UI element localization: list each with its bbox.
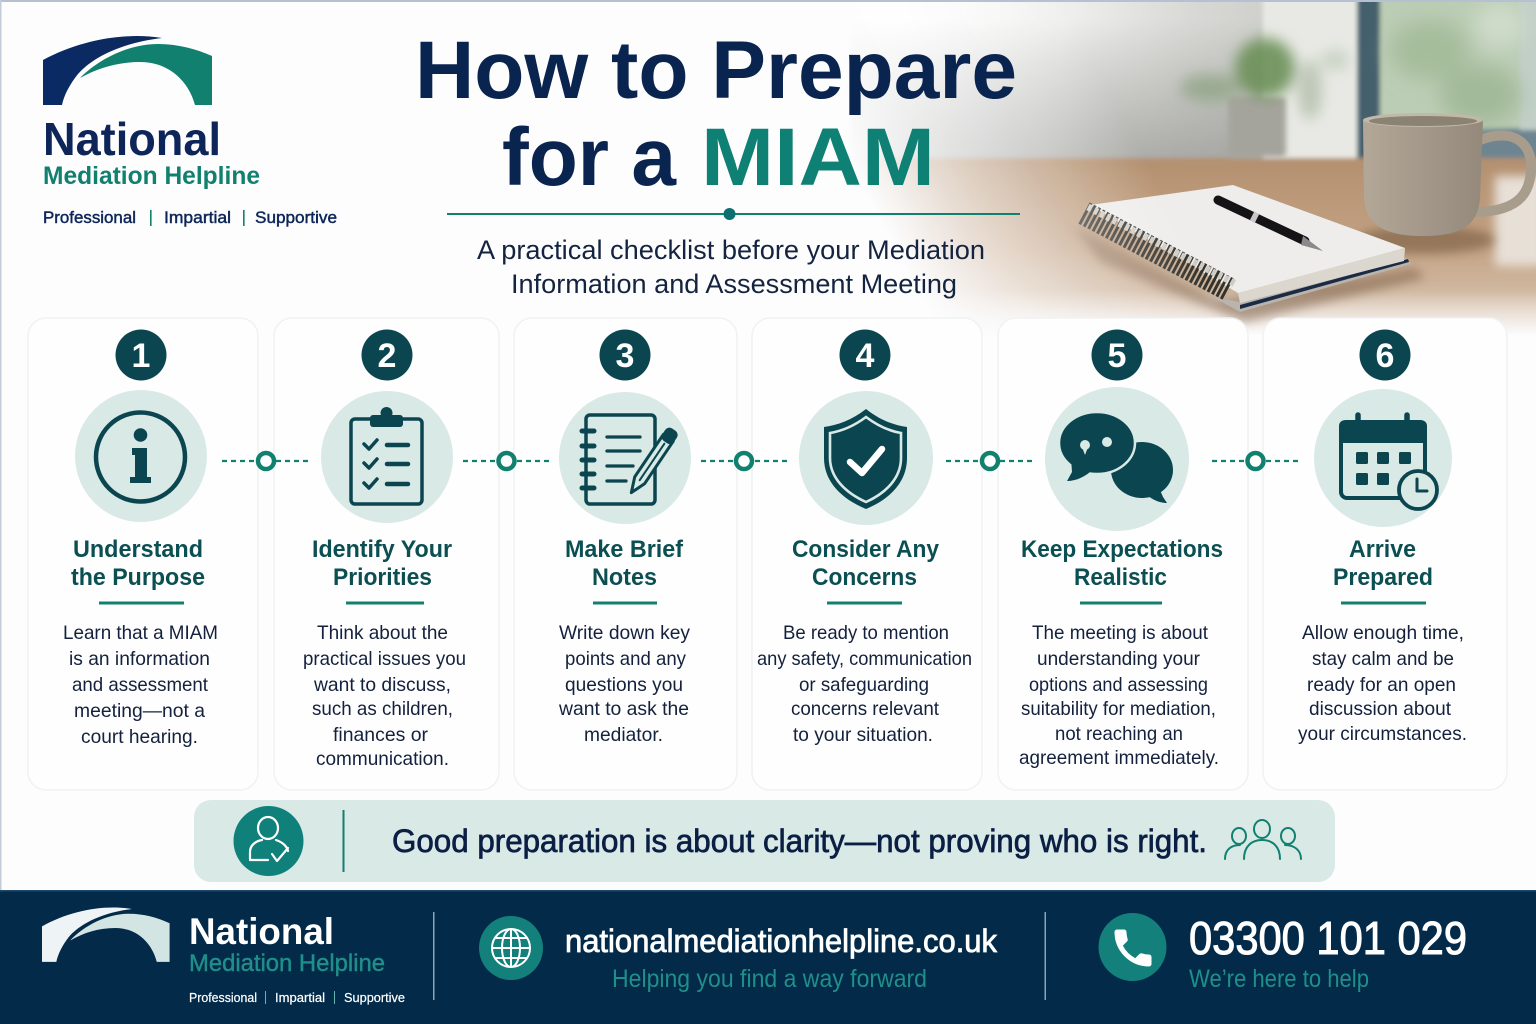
panel: step 3 make brief notes: Write down key <box>559 622 690 644</box>
connector: step 5 to 6 <box>1212 453 1300 469</box>
website: nationalmediationhelpline.co.uk <box>565 923 998 959</box>
panel: step 5 keep expectations realistic <box>998 318 1248 790</box>
icon: person with check <box>250 817 288 861</box>
panel: step 4 consider any concerns: concerns relevant <box>791 698 940 720</box>
phone <box>1098 912 1467 993</box>
panel: step 3 make brief notes: mediator. <box>584 724 663 746</box>
panel: step 3 make brief notes: 3 <box>616 337 634 375</box>
logo: National Mediation Helpline <box>43 36 337 227</box>
pen <box>1218 200 1323 251</box>
panel: step 6 arrive prepared: Arrive <box>1349 536 1416 563</box>
panel: step 3 make brief notes: Make Brief <box>565 536 684 563</box>
panel: step 2 identify your priorities: 2 <box>378 337 396 375</box>
footer logo: Professional <box>189 991 257 1005</box>
icon: shield with check <box>824 409 907 509</box>
panel: step 1 understand the purpose: the Purpose <box>71 564 205 591</box>
logo arch <box>43 36 212 105</box>
logo: National Mediation Helpline: National <box>43 113 221 165</box>
panel: step 6 arrive prepared: stay calm and be <box>1312 648 1454 670</box>
panel: step 5 keep expectations realistic: The meeting is about <box>1032 622 1209 644</box>
icon: notepad and pencil <box>582 415 680 504</box>
panel: step 2 identify your priorities: Priorities <box>333 564 432 591</box>
panel: step 5 keep expectations realistic: Keep Expectations <box>1021 536 1223 563</box>
footer logo: National <box>189 911 334 952</box>
panel: step 5 keep expectations realistic: not reaching an <box>1055 723 1183 745</box>
subtitle <box>477 235 985 299</box>
photo: notebook, pen and mug on a desk <box>850 0 1536 352</box>
panel: step 1 understand the purpose: court hearing. <box>81 726 198 748</box>
icon: information <box>96 412 185 502</box>
panel: step 3 make brief notes: want to ask the <box>558 698 689 720</box>
callout banner <box>194 800 1335 882</box>
website: Helping you find a way forward <box>612 965 927 993</box>
panel: step 6 arrive prepared: Allow enough time, <box>1302 622 1464 644</box>
panel: step 4 consider any concerns: Consider Any <box>792 536 940 563</box>
title <box>415 25 1017 203</box>
panel: step 6 arrive prepared <box>1263 318 1507 790</box>
panel: step 1 understand the purpose: and assessment <box>72 674 209 696</box>
panel: step 5 keep expectations realistic: Realistic <box>1074 564 1167 591</box>
title: for a <box>502 112 677 203</box>
panel: step 4 consider any concerns: or safeguarding <box>799 674 929 696</box>
phone: 03300 101 029 <box>1189 912 1467 964</box>
panel: step 3 make brief notes: Notes <box>592 564 657 591</box>
footer logo: Mediation Helpline <box>189 950 385 977</box>
panel: step 2 identify your priorities: want to discuss, <box>313 674 451 696</box>
panel: step 6 arrive prepared: ready for an open <box>1307 674 1456 696</box>
panel: step 6 arrive prepared: discussion about <box>1309 698 1452 720</box>
panel: step 2 identify your priorities: Think about the <box>317 622 448 644</box>
icon: group of people <box>1225 820 1301 859</box>
callout banner: Good preparation is about clarity—not proving who is right. <box>392 823 1207 859</box>
panel: step 4 consider any concerns: Concerns <box>812 564 917 591</box>
panel: step 6 arrive prepared: 6 <box>1376 337 1394 375</box>
icon: speech bubbles <box>1059 412 1173 503</box>
connector: step 2 to 3 <box>463 453 550 469</box>
panel: step 4 consider any concerns: 4 <box>856 337 875 375</box>
panel: step 2 identify your priorities <box>274 318 499 790</box>
panel: step 3 make brief notes: points and any <box>565 648 686 670</box>
connector: step 4 to 5 <box>946 453 1035 469</box>
panel: step 1 understand the purpose: is an information <box>69 648 210 670</box>
panel: step 6 arrive prepared: Prepared <box>1333 564 1433 591</box>
icon: telephone handset <box>1115 930 1151 966</box>
panel: step 5 keep expectations realistic: understanding your <box>1037 648 1200 670</box>
panel: step 5 keep expectations realistic: 5 <box>1108 337 1126 375</box>
logo: National Mediation Helpline: Impartial <box>164 209 231 227</box>
phone: We’re here to help <box>1189 965 1369 993</box>
footer <box>0 890 1536 1024</box>
footer logo: Supportive <box>344 991 405 1005</box>
connector: step 3 to 4 <box>701 453 788 469</box>
notebook <box>1084 185 1411 312</box>
panel: step 4 consider any concerns: to your situation. <box>793 724 933 746</box>
panel: step 5 keep expectations realistic: suitability for mediation, <box>1021 698 1216 720</box>
panel: step 4 consider any concerns <box>752 318 982 790</box>
subtitle: A practical checklist before your Mediation <box>477 235 985 265</box>
panel: step 1 understand the purpose <box>28 318 258 790</box>
panel: step 2 identify your priorities: finances or <box>333 724 428 746</box>
title: MIAM <box>701 112 935 203</box>
panel: step 3 make brief notes <box>514 318 737 790</box>
icon: clipboard checklist <box>351 407 422 504</box>
panel: step 1 understand the purpose: Learn that a MIAM <box>63 622 218 644</box>
mug <box>1363 113 1531 236</box>
panel: step 2 identify your priorities: practical issues you <box>303 648 466 670</box>
panel: step 6 arrive prepared: your circumstances. <box>1298 723 1467 745</box>
icon: globe <box>492 929 530 967</box>
icon: calendar with clock <box>1339 415 1437 509</box>
panel: step 2 identify your priorities: such as children, <box>312 698 453 720</box>
panel: step 5 keep expectations realistic: options and assessing <box>1029 674 1208 696</box>
connector: step 1 to 2 <box>222 453 310 469</box>
logo: National Mediation Helpline: Supportive <box>255 209 337 227</box>
website <box>479 916 998 993</box>
panel: step 4 consider any concerns: Be ready to mention <box>783 622 949 644</box>
title divider with dot <box>447 208 1020 220</box>
footer logo: Impartial <box>275 991 325 1005</box>
logo: National Mediation Helpline: Professional <box>43 209 136 227</box>
panel: step 5 keep expectations realistic: agreement immediately. <box>1019 747 1219 769</box>
footer logo <box>42 907 405 1005</box>
panel: step 2 identify your priorities: communication. <box>316 748 449 770</box>
panel: step 4 consider any concerns: any safety, communication <box>757 648 972 670</box>
panel: step 1 understand the purpose: Understand <box>73 536 203 563</box>
panel: step 1 understand the purpose: 1 <box>132 337 150 375</box>
panel: step 3 make brief notes: questions you <box>565 674 683 696</box>
title: How to Prepare <box>415 25 1017 116</box>
logo: National Mediation Helpline: Mediation Helpline <box>43 162 260 190</box>
panel: step 2 identify your priorities: Identify Your <box>312 536 452 563</box>
subtitle: Information and Assessment Meeting <box>511 269 957 299</box>
panel: step 1 understand the purpose: meeting—not a <box>74 700 205 722</box>
